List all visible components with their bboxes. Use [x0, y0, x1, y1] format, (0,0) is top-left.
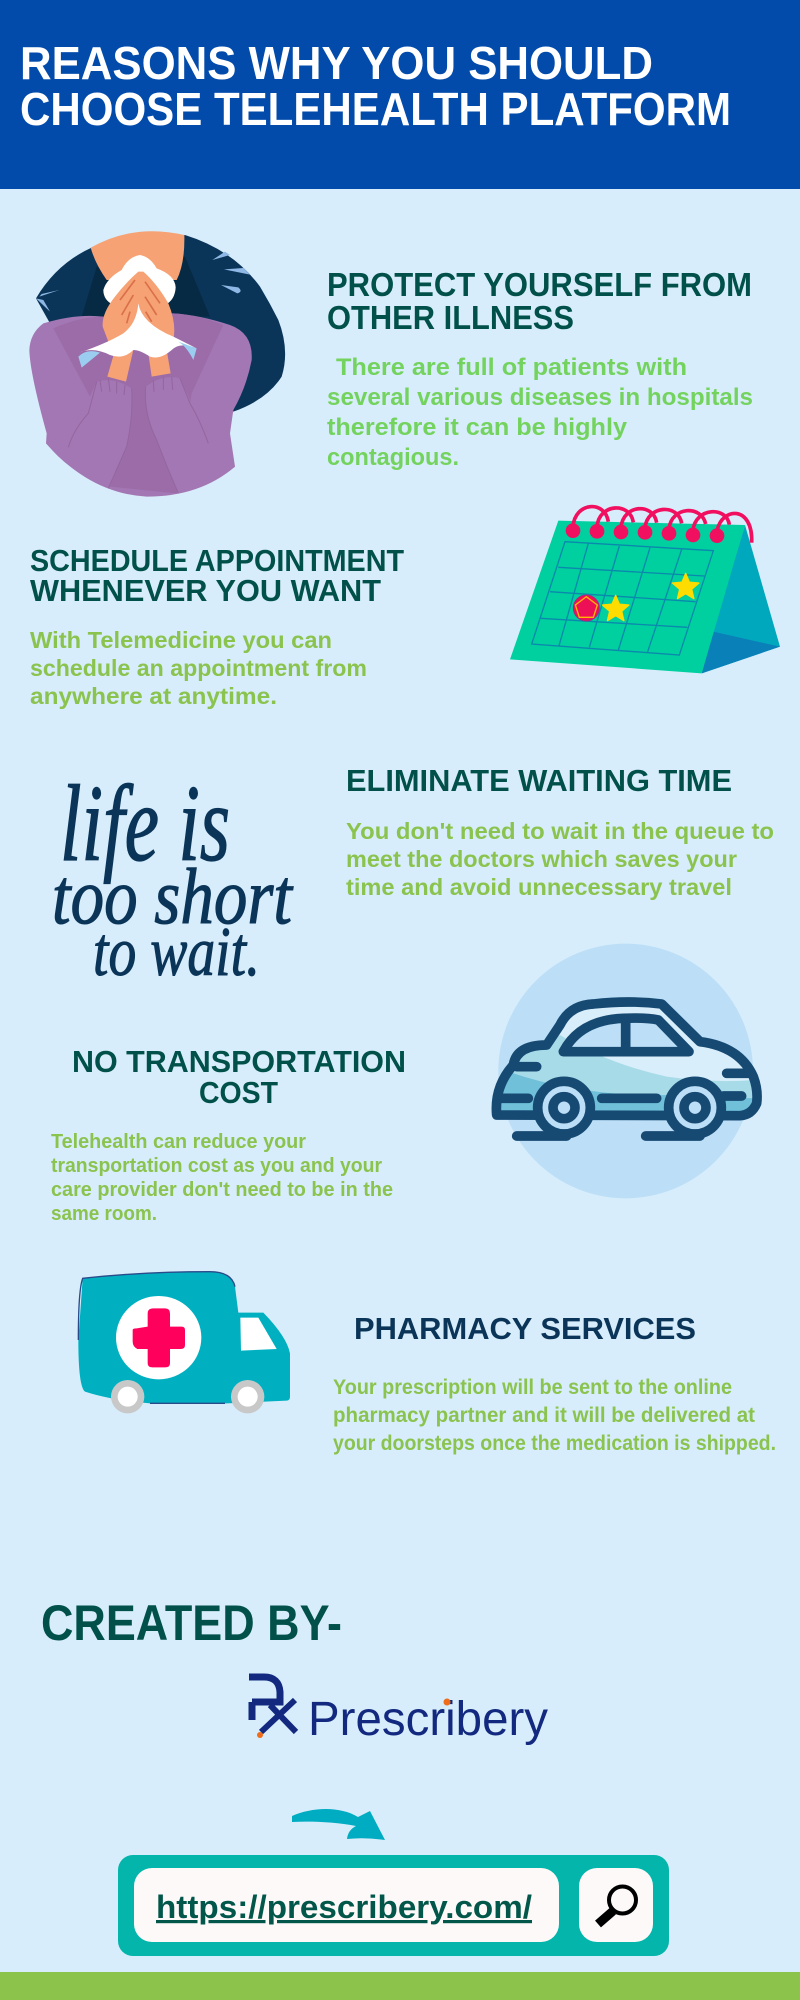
text: no transportation cost	[51, 1130, 393, 1225]
url text: https://prescribery.com/	[156, 1889, 532, 1925]
icon: sneezing person	[29, 231, 285, 497]
text: protect yourself: therefore it can be highly	[327, 414, 628, 441]
heading: created by: CREATED BY-	[41, 1595, 342, 1651]
text: pharmacy services	[333, 1375, 776, 1455]
text: schedule appointment	[30, 627, 367, 709]
text: schedule appointment: With Telemedicine you can	[30, 627, 332, 653]
text: schedule appointment: anywhere at anytime.	[30, 683, 277, 709]
title	[20, 37, 731, 135]
panel: eliminate waiting time	[52, 763, 774, 991]
hand lettering: life is too short to wait: to wait.	[93, 914, 260, 991]
panel: schedule appointment	[30, 507, 780, 709]
title: CHOOSE TELEHEALTH PLATFORM	[20, 83, 731, 135]
title: REASONS WHY YOU SHOULD	[20, 37, 653, 89]
icon: delivery van	[78, 1272, 290, 1413]
icon: desk calendar	[510, 507, 780, 673]
text: no transportation cost: transportation cost as you and your	[51, 1154, 382, 1177]
logo: Prescribery	[249, 1677, 548, 1746]
hand lettering: life is too short to wait: life is	[60, 764, 230, 885]
heading: no transportation cost: COST	[199, 1075, 278, 1110]
footer band	[0, 1972, 800, 2000]
heading: protect yourself	[327, 266, 752, 336]
text: protect yourself: There are full of patients with	[336, 354, 687, 381]
header band	[0, 0, 800, 189]
heading: schedule appointment: SCHEDULE APPOINTMENT	[30, 543, 404, 578]
icon: magnifying glass	[598, 1886, 636, 1924]
heading: eliminate waiting time: ELIMINATE WAITING TIME	[346, 763, 732, 798]
heading: schedule appointment	[30, 543, 404, 608]
heading: no transportation cost: NO TRANSPORTATION	[72, 1044, 406, 1079]
search bar	[118, 1855, 669, 1956]
heading: protect yourself: OTHER ILLNESS	[327, 299, 574, 336]
text: eliminate waiting time: You don't need to wait in the queue to	[346, 818, 774, 844]
arrow	[292, 1809, 385, 1840]
text: protect yourself	[327, 354, 753, 471]
panel: no transportation cost	[51, 944, 757, 1225]
text: schedule appointment: schedule an appointment from	[30, 655, 367, 681]
heading: no transportation cost	[72, 1044, 406, 1110]
text: protect yourself: contagious.	[327, 444, 459, 471]
text: pharmacy services: pharmacy partner and it will be delivered at	[333, 1403, 755, 1427]
hand lettering: life is too short to wait: too short	[52, 854, 294, 941]
text: eliminate waiting time: meet the doctors which saves your	[346, 846, 737, 872]
text: protect yourself: several various diseases in hospitals	[327, 384, 753, 411]
heading: pharmacy services: PHARMACY SERVICES	[354, 1311, 696, 1346]
panel: protect yourself	[29, 231, 753, 497]
text: no transportation cost: care provider don't need to be in the	[51, 1178, 393, 1201]
text: no transportation cost: Telehealth can reduce your	[51, 1130, 306, 1153]
logo: Prescribery: Prescribery	[308, 1693, 548, 1746]
text: no transportation cost: same room.	[51, 1202, 157, 1225]
text: eliminate waiting time	[346, 818, 774, 900]
heading: schedule appointment: WHENEVER YOU WANT	[30, 573, 381, 608]
heading: protect yourself: PROTECT YOURSELF FROM	[327, 266, 752, 303]
text: pharmacy services: Your prescription will be sent to the online	[333, 1375, 732, 1399]
icon: car	[496, 944, 757, 1198]
panel: pharmacy services	[78, 1272, 776, 1455]
hand lettering: life is too short to wait	[52, 764, 294, 991]
text: eliminate waiting time: time and avoid unnecessary travel	[346, 874, 732, 900]
